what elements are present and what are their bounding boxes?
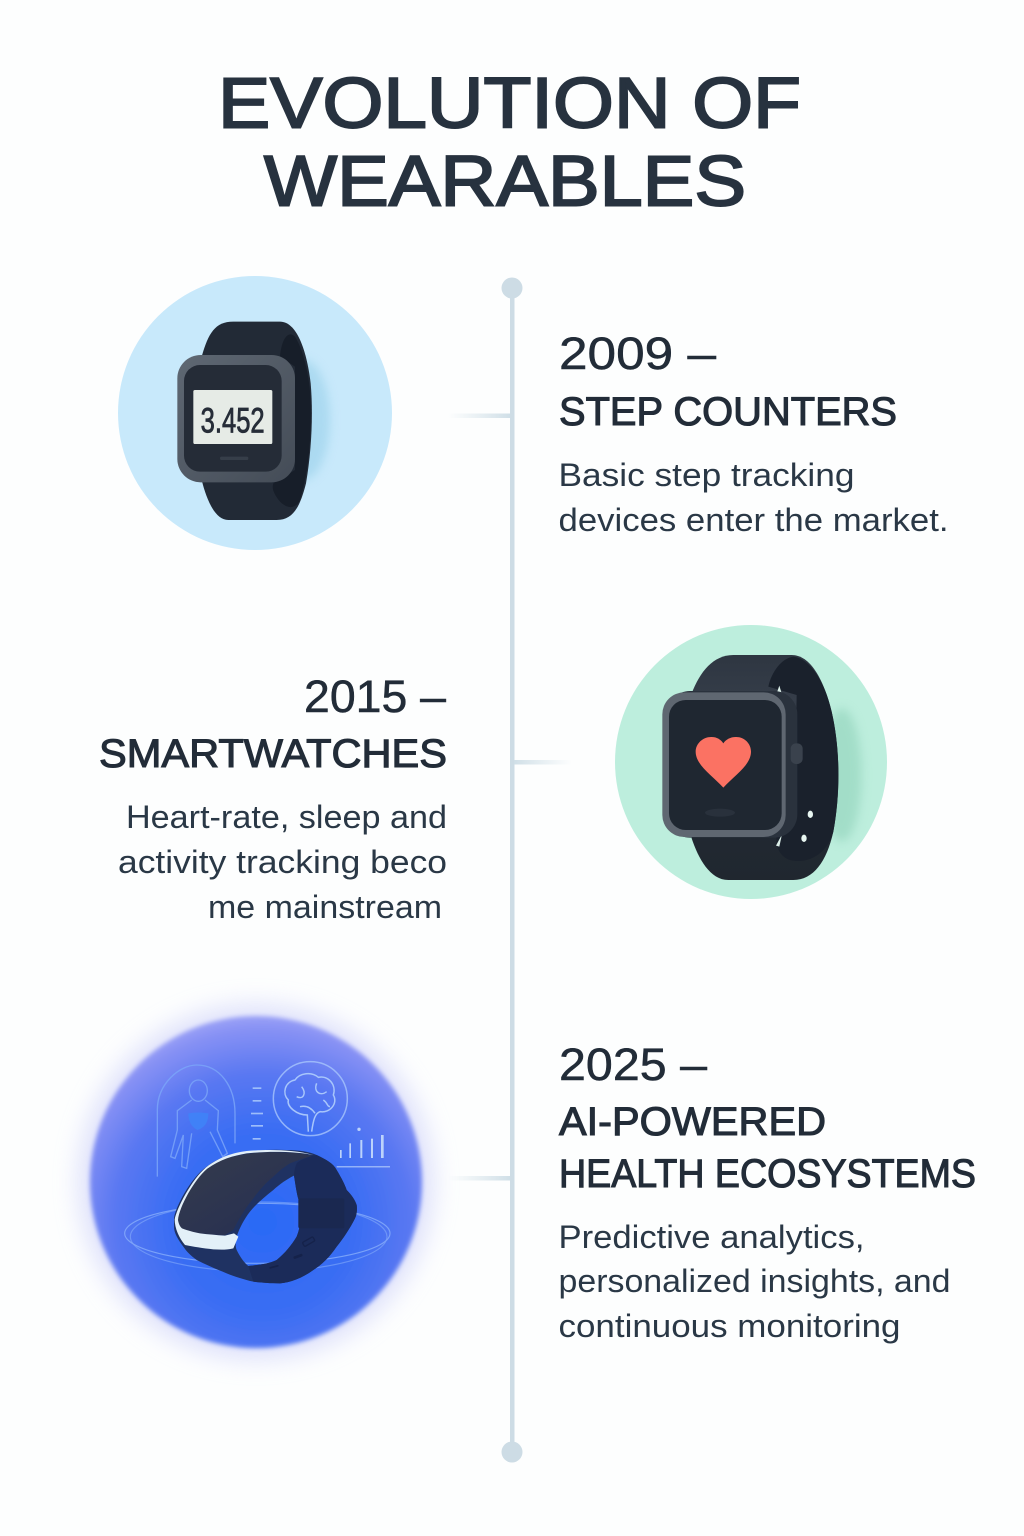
display xyxy=(193,390,272,444)
text block: 2025 AI-powered health ecosystems: continuous monitoring xyxy=(558,1308,900,1344)
text block: 2015 smartwatches: me mainstream xyxy=(208,889,442,925)
text block: 2015 smartwatches: Heart-rate, sleep and xyxy=(126,799,447,835)
text block: 2015 smartwatches: SMARTWATCHES xyxy=(99,732,447,776)
strap xyxy=(692,655,838,880)
icon: body scan outline xyxy=(157,1065,235,1177)
text block: 2009 step counters: devices enter the market. xyxy=(558,502,948,538)
title: EVOLUTION OF xyxy=(218,64,801,144)
icon: brain in circle xyxy=(273,1062,347,1136)
panel: 2009 step counter icon: 3.452 xyxy=(201,402,265,441)
panel: 2025 AI wearable icon xyxy=(78,1004,434,1360)
text block: 2025 AI-powered health ecosystems: personalized insights, and xyxy=(558,1263,950,1299)
strap buckle xyxy=(298,1198,344,1228)
text block: 2015 smartwatches: activity tracking beco xyxy=(118,844,447,880)
band top face xyxy=(177,1152,312,1235)
connector: 2009 xyxy=(448,414,510,418)
panel: 2015 smartwatch icon xyxy=(615,625,887,899)
orbit rings xyxy=(125,1202,390,1271)
timeline axis xyxy=(502,278,522,1462)
text block: 2025 AI-powered health ecosystems: Predictive analytics, xyxy=(558,1219,864,1255)
connector: 2015 xyxy=(514,760,572,764)
connector: 2025 xyxy=(448,1176,510,1180)
text block: 2009 step counters: Basic step tracking xyxy=(558,457,854,493)
case xyxy=(177,355,295,482)
title: WEARABLES xyxy=(264,142,746,222)
text block: 2025 AI-powered health ecosystems: HEALTH ECOSYSTEMS xyxy=(559,1152,976,1196)
text block: 2025 AI-powered health ecosystems xyxy=(558,1039,976,1344)
case xyxy=(667,691,797,838)
band white edge xyxy=(175,1150,313,1250)
icon: mini bar chart xyxy=(337,1128,390,1167)
panel: 2009 step counter icon xyxy=(118,276,392,550)
text block: 2009 step counters: 2009 – xyxy=(559,328,716,379)
text block: 2025 AI-powered health ecosystems: AI-POWERED xyxy=(559,1100,826,1144)
text block: 2015 smartwatches xyxy=(99,671,447,925)
text block: 2009 step counters: STEP COUNTERS xyxy=(559,390,897,434)
text block: 2025 AI-powered health ecosystems: 2025 – xyxy=(559,1039,707,1090)
wristband xyxy=(174,1150,357,1283)
text block: 2009 step counters xyxy=(558,328,948,538)
text block: 2015 smartwatches: 2015 – xyxy=(304,671,446,722)
icon: metric ticks xyxy=(251,1087,263,1140)
strap xyxy=(202,322,312,520)
icon: heart xyxy=(696,737,751,788)
title xyxy=(218,64,801,222)
